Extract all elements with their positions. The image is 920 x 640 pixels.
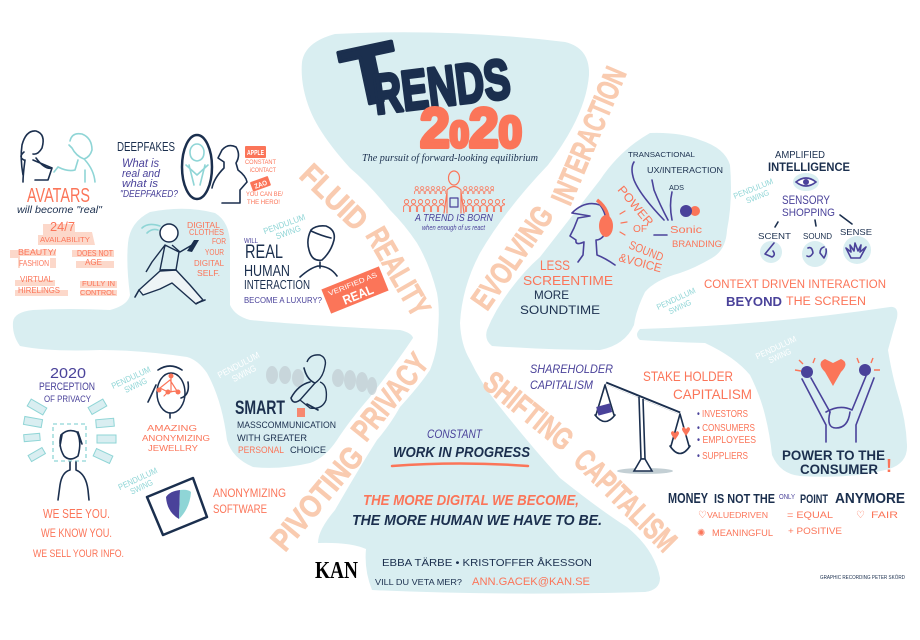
- heading: 2020 perception of privacy: 2020: [50, 365, 86, 382]
- tag: zao you can be the hero: YOU CAN BE/: [246, 191, 283, 198]
- diagram: senses: SCENT: [758, 231, 791, 241]
- text: will real human interaction: WILL: [244, 236, 258, 245]
- list: stakeholders: [697, 409, 756, 462]
- text: digital clothes: DIGITAL: [194, 259, 225, 268]
- text: power of sound and voice: POWER: [615, 183, 657, 229]
- list: values: + POSITIVE: [788, 526, 842, 536]
- text: power to the consumer: [782, 448, 892, 477]
- text: avatar benefits: HIRELINGS: [18, 285, 60, 295]
- pendulum swing label: sensory: SWING: [745, 188, 770, 205]
- text: avatar benefits: BEAUTY/: [18, 247, 57, 257]
- tag: zao you can be the hero: [246, 176, 283, 206]
- text: shareholder capitalism: SHAREHOLDER: [530, 362, 613, 376]
- text: avatar benefits: CONTROL: [80, 288, 116, 297]
- text: stakeholder capitalism: CAPITALISM: [673, 386, 752, 402]
- highlights: avatar benefits: [10, 224, 117, 296]
- text: what is real: What is: [122, 156, 159, 170]
- section title: pivoting privacy: PIVOTING: [264, 439, 371, 557]
- illustration: crowd and man with phone: [266, 355, 377, 410]
- pendulum swing label: software: SWING: [129, 477, 154, 496]
- text: context driven interaction: [704, 279, 886, 309]
- heading: 2020 perception of privacy: OF PRIVACY: [44, 394, 91, 404]
- illustration: mirror and man: [182, 135, 247, 203]
- text: anonymizing software: SOFTWARE: [213, 504, 267, 516]
- diagram: sonic branding channels: UX/INTERACTION: [647, 166, 723, 175]
- text: digital clothes: CLOTHES: [189, 228, 224, 237]
- subtitle: The pursuit of forward-looking equilibrium: [362, 153, 538, 164]
- label: a trend is born: [414, 212, 493, 232]
- pendulum swing label: jewellery: SWING: [123, 376, 149, 395]
- diagram: sonic branding channels: TRANSACTIONAL: [628, 150, 695, 159]
- heading: amplified intelligence: INTELLIGENCE: [768, 160, 850, 174]
- text: we see you: WE SELL YOUR INFO.: [33, 548, 124, 560]
- list: values: ✺: [697, 528, 705, 539]
- list: values: ♡: [698, 510, 707, 521]
- text: avatar benefits: FASHION: [19, 258, 49, 268]
- text: what is real: real and: [122, 168, 161, 180]
- illustration: real man portrait: [300, 226, 337, 277]
- text: context driven interaction: CONTEXT DRIVEN INTERACTION: [704, 279, 886, 291]
- text: avatar benefits: FULLY IN: [82, 279, 115, 288]
- list: stakeholders: • SUPPLIERS: [697, 451, 748, 462]
- illustration: watched person with cameras: [23, 399, 116, 500]
- text: power to the consumer: CONSUMER: [800, 462, 878, 477]
- text: digital clothes: DIGITAL: [187, 221, 221, 230]
- heading: 2020 perception of privacy: PERCEPTION: [39, 381, 95, 393]
- list: values: [697, 510, 898, 539]
- text: digital clothes: YOUR: [205, 248, 224, 257]
- section title: shifting capitalism: SHIFTING: [477, 364, 580, 458]
- text: what is real: "DEEPFAKED?: [120, 189, 178, 200]
- text: avatar benefits: AGE: [85, 258, 102, 267]
- pendulum swing label: real human: PENDULUM: [262, 212, 307, 236]
- section title: pivoting privacy: [264, 346, 436, 557]
- section title: fluid reality: FLUID: [293, 157, 375, 238]
- illustration: jewellery face: [148, 366, 188, 418]
- heading: constant work in progress: CONSTANT: [427, 427, 483, 441]
- text: stakeholder capitalism: [643, 368, 752, 402]
- list: stakeholders: • EMPLOYEES: [697, 435, 756, 446]
- text: less screentime more soundtime: SCREENTIME: [523, 273, 613, 288]
- credits and contact: ANN.GACEK@KAN.SE: [472, 576, 590, 588]
- tag: apple constant contact: APPLE: [247, 150, 264, 157]
- tag: zao you can be the hero: THE HERO!: [247, 199, 280, 206]
- text: power of sound and voice: OF: [633, 224, 647, 235]
- text: will real human interaction: INTERACTION: [244, 277, 310, 292]
- tag: zao you can be the hero: ZAO: [254, 180, 269, 191]
- text: amazing anonymizing jewellery: AMAZING: [147, 423, 197, 433]
- text: smart masscommunication: SMART: [235, 398, 285, 419]
- text: digital clothes: SELF.: [197, 269, 220, 278]
- background: left band: [13, 209, 413, 468]
- list: values: MEANINGFUL: [712, 528, 773, 538]
- heading: 2020 perception of privacy: [39, 365, 95, 404]
- list: values: FAIR: [871, 510, 898, 521]
- text: smart masscommunication: [235, 398, 336, 456]
- text: power of sound and voice: &VOICE: [617, 250, 663, 275]
- text: power to the consumer: POWER TO THE: [782, 448, 885, 463]
- section title: fluid reality: REALITY: [359, 221, 438, 323]
- text: less screentime more soundtime: SOUNDTIME: [520, 303, 600, 317]
- list: stakeholders: • CONSUMERS: [697, 423, 755, 434]
- title word: trends: T: [334, 25, 408, 126]
- illustration: person cheering with heart: [795, 358, 880, 442]
- icon: eye: [793, 173, 819, 191]
- text: avatar benefits: 24/7: [50, 219, 75, 234]
- credit: graphic recording: GRAPHIC RECORDING PETER SKÖRD: [820, 574, 905, 581]
- quote: the more digital we become: THE MORE DIGITAL WE BECOME,: [363, 492, 579, 509]
- section title: shifting capitalism: [477, 364, 684, 559]
- text: context driven interaction: BEYOND: [726, 295, 782, 309]
- text: digital clothes: [187, 221, 226, 278]
- heading: avatars: AVATARS: [27, 185, 90, 207]
- text: sensory shopping: SHOPPING: [782, 207, 835, 219]
- text: anonymizing software: ANONYMIZING: [213, 488, 286, 500]
- text: less screentime more soundtime: LESS: [540, 257, 570, 273]
- credits and contact: EBBA TÄRBE • KRISTOFFER ÅKESSON: [382, 556, 592, 569]
- section title: fluid reality: [293, 157, 438, 323]
- pendulum swing label: smart: PENDULUM: [216, 350, 261, 380]
- text: smart masscommunication: CHOICE: [290, 445, 326, 456]
- diagram: senses: [758, 215, 872, 267]
- text: avatar benefits: VIRTUAL: [20, 274, 53, 284]
- list: values: = EQUAL: [787, 510, 833, 521]
- diagram: senses: SOUND: [803, 231, 832, 241]
- diagram: senses: SENSE: [840, 227, 872, 237]
- tag: apple constant contact: CONSTANT: [245, 159, 276, 166]
- text: context driven interaction: THE SCREEN: [786, 296, 866, 308]
- list: values: ♡: [856, 510, 865, 521]
- text: smart masscommunication: PERSONAL: [238, 445, 284, 456]
- tag: apple constant contact: iCONTACT: [250, 167, 276, 174]
- pendulum swing label: smart: SWING: [230, 363, 258, 384]
- illustration: person with headphones: [570, 200, 627, 265]
- credits and contact: [375, 556, 592, 588]
- diagram: sonic branding channels: ADS: [669, 183, 684, 192]
- heading: money is not the only point anymore: IS NOT THE: [714, 492, 775, 506]
- pendulum swing label: power: PENDULUM: [754, 334, 798, 361]
- text: power of sound and voice: SOUND: [627, 238, 666, 264]
- title word: trends: [334, 25, 513, 126]
- heading: constant work in progress: WORK IN PROGRESS: [393, 444, 530, 461]
- text: amazing anonymizing jewellery: JEWELLRY: [148, 443, 198, 453]
- diagram: sonic branding channels: [628, 150, 723, 250]
- text: we see you: WE SEE YOU.: [43, 507, 110, 521]
- section title: shifting capitalism: CAPITALISM: [567, 442, 684, 559]
- title year: 2020: 2020: [420, 96, 522, 159]
- text: amazing anonymizing jewellery: [142, 423, 210, 453]
- background: central hourglass: [302, 32, 660, 594]
- text: shareholder capitalism: CAPITALISM: [530, 378, 593, 392]
- heading: deepfakes: DEEPFAKES: [117, 139, 175, 154]
- text: will real human interaction: REAL: [245, 242, 283, 263]
- text: will real human interaction: HUMAN: [244, 263, 290, 280]
- heading: money is not the only point anymore: POINT: [800, 492, 829, 506]
- heading: amplified intelligence: [768, 149, 850, 174]
- text: amazing anonymizing jewellery: ANONYMIZING: [142, 433, 210, 443]
- pendulum swing label: real human: SWING: [274, 223, 302, 241]
- illustration: walking man with phone: [135, 224, 205, 304]
- pendulum swing label: context: PENDULUM: [655, 286, 697, 312]
- text: anonymizing software: [213, 488, 286, 516]
- main title: [334, 25, 522, 159]
- illustration: avatars shaking hands: [21, 131, 95, 182]
- quote: the more digital we become: THE MORE HUMAN WE HAVE TO BE.: [352, 512, 602, 529]
- text: what is real: what is: [122, 178, 159, 190]
- text: will real human interaction: BECOME A LUXURY?: [244, 296, 323, 305]
- pendulum swing label: software: PENDULUM: [117, 465, 159, 492]
- crowd illustration: a trend is born: [403, 171, 505, 213]
- text: digital clothes: FOR: [212, 237, 226, 246]
- text: stakeholder capitalism: STAKE HOLDER: [643, 368, 733, 384]
- pendulum swing label: context: SWING: [667, 298, 693, 316]
- list: values: VALUEDRIVEN: [707, 510, 768, 520]
- text: will become real: will become "real": [17, 204, 103, 216]
- text: sensory shopping: [782, 193, 835, 219]
- text: shareholder capitalism: [530, 362, 613, 392]
- logo: kan: KAN: [315, 558, 359, 584]
- label: a trend is born: when enough of us react: [422, 225, 486, 232]
- credits and contact: VILL DU VETA MER?: [375, 577, 462, 587]
- background: lower right band: [637, 307, 907, 477]
- text: less screentime more soundtime: [520, 257, 613, 317]
- pendulum swing label: jewellery: PENDULUM: [110, 364, 152, 391]
- diagram: sonic branding channels: Sonic: [670, 224, 702, 236]
- heading: money is not the only point anymore: MONEY: [668, 490, 708, 507]
- text: avatar benefits: [18, 219, 116, 297]
- label: a trend is born: A TREND IS BORN: [414, 212, 493, 224]
- text: what is real: [120, 156, 178, 200]
- pendulum swing label: sensory: PENDULUM: [732, 177, 775, 201]
- background: upper right band: [486, 133, 731, 350]
- text: we see you: [33, 507, 124, 560]
- heading: money is not the only point anymore: ONLY: [779, 492, 795, 501]
- text: sensory shopping: SENSORY: [782, 193, 830, 207]
- sticker: verified as real: REAL: [340, 282, 376, 308]
- illustration: balance scale: [595, 383, 690, 474]
- heading: money is not the only point anymore: [668, 490, 905, 507]
- heading: constant work in progress: [392, 427, 530, 466]
- section title: pivoting privacy: PRIVACY: [344, 346, 436, 447]
- heading: money is not the only point anymore: ANYMORE: [835, 490, 905, 507]
- text: less screentime more soundtime: MORE: [534, 288, 569, 302]
- section title: evolving interaction: INTERACTION: [544, 62, 633, 210]
- text: power to the consumer: !: [886, 456, 892, 476]
- list: stakeholders: • INVESTORS: [697, 409, 748, 420]
- section title: evolving interaction: [464, 62, 633, 316]
- text: we see you: WE KNOW YOU.: [41, 526, 112, 540]
- quote: the more digital we become: [352, 492, 602, 529]
- sticker: verified as real: [321, 266, 389, 314]
- text: smart masscommunication: MASSCOMMUNICATION: [237, 420, 336, 430]
- text: avatar benefits: AVAILABILITY: [40, 235, 90, 244]
- section title: evolving interaction: EVOLVING: [464, 199, 560, 316]
- sticker: verified as real: VERIFIED AS: [328, 272, 379, 298]
- text: smart masscommunication: WITH GREATER: [237, 433, 307, 443]
- heading: amplified intelligence: AMPLIFIED: [775, 149, 825, 161]
- icon: coral shopping bag: [297, 408, 305, 417]
- text: avatar benefits: DOES NOT: [77, 249, 113, 258]
- pendulum swing label: power: SWING: [767, 346, 793, 365]
- text: will real human interaction: [244, 236, 323, 305]
- tag: apple constant contact: [245, 146, 276, 174]
- diagram: sonic branding channels: BRANDING: [672, 239, 722, 250]
- text: power of sound and voice: [615, 183, 666, 275]
- illustration: screen with shield: [147, 478, 207, 535]
- title word: trends: RENDS: [370, 47, 513, 126]
